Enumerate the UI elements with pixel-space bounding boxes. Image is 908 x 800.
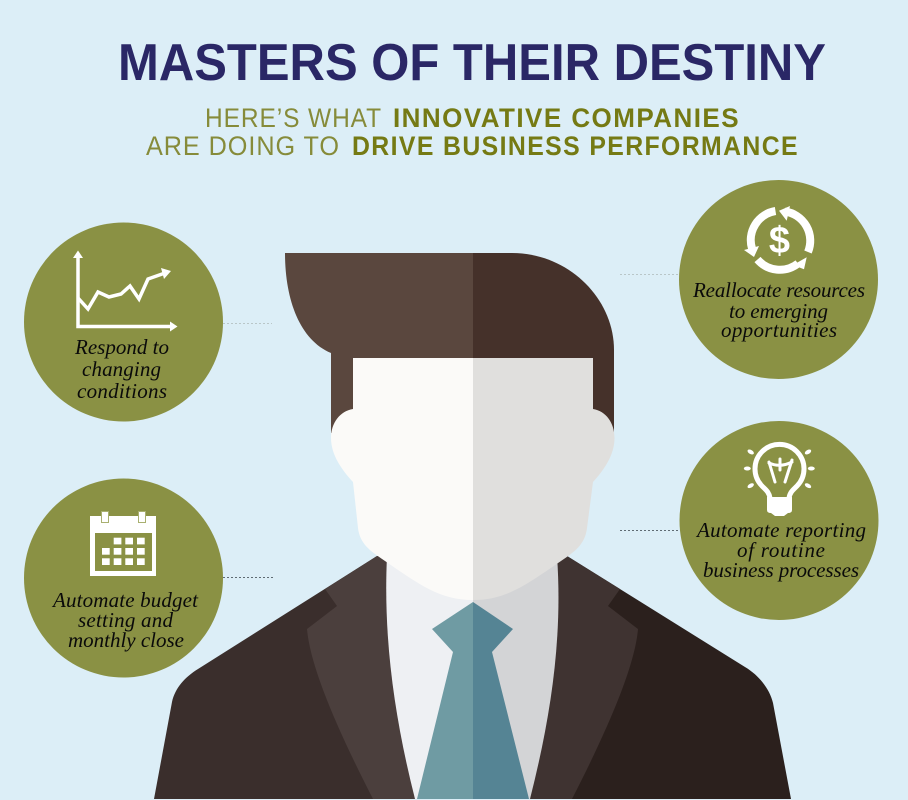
- subtitle: DRIVE BUSINESS PERFORMANCE: [352, 131, 799, 161]
- label: reporting: Automate reporting: [695, 518, 866, 542]
- label: budget: monthly close: [68, 628, 184, 652]
- label: budget: [51, 588, 199, 652]
- label: reporting: business processes: [703, 558, 859, 582]
- jacket: [154, 556, 791, 799]
- subtitle: ARE DOING TO: [146, 131, 340, 161]
- label: reallocate: opportunities: [721, 318, 837, 342]
- icon: dollar cycle: [744, 206, 810, 270]
- subtitle: HERE’S WHAT: [205, 103, 382, 133]
- label: respond: changing: [82, 357, 161, 381]
- title: MASTERS OF THEIR DESTINY: [118, 34, 826, 92]
- figure: businessman: [154, 253, 791, 799]
- panel: reallocate resources: [679, 180, 878, 379]
- label: reporting: [695, 518, 866, 582]
- hair: [285, 253, 614, 433]
- icon: line chart: [73, 250, 178, 332]
- label: budget: Automate budget: [51, 588, 199, 612]
- label: respond: conditions: [77, 379, 167, 403]
- icon: calendar: [90, 512, 156, 576]
- icon: dollar cycle: $: [769, 220, 790, 262]
- panel: respond to changing conditions: [24, 222, 223, 422]
- label: reallocate: to emerging: [729, 299, 828, 323]
- connector: budget: [223, 576, 273, 578]
- lapels: [307, 556, 638, 799]
- connector: respond: [223, 322, 272, 324]
- subtitle: [146, 103, 799, 161]
- face: [331, 358, 614, 600]
- label: reporting: of routine: [737, 538, 825, 562]
- label: budget: setting and: [78, 608, 174, 632]
- panel: automate reporting: [680, 421, 878, 620]
- label: respond: [74, 335, 169, 403]
- icon: light bulb: [744, 444, 815, 516]
- subtitle: INNOVATIVE COMPANIES: [393, 103, 740, 133]
- label: reallocate: [692, 278, 865, 342]
- circle: budget: [24, 478, 223, 678]
- circle: reallocate: [679, 180, 878, 379]
- connector: reallocate: [620, 274, 679, 276]
- tie: [417, 602, 529, 799]
- circle: respond: [24, 222, 223, 422]
- connector: reporting: [620, 530, 680, 532]
- panel: automate budget setting: [24, 478, 223, 678]
- shirt: [386, 556, 558, 799]
- label: respond: Respond to: [74, 335, 169, 359]
- circle: reporting: [680, 421, 878, 620]
- label: reallocate: Reallocate resources: [692, 278, 865, 302]
